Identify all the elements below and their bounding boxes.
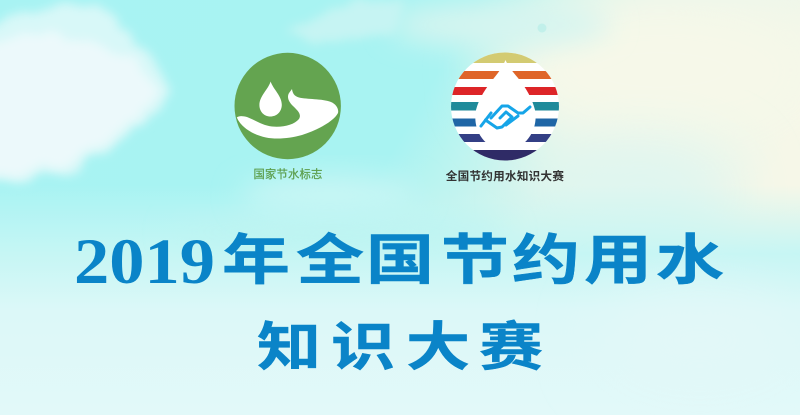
title chars: 节 [441, 230, 509, 291]
title chars: 用 [584, 230, 652, 291]
title chars: 约 [512, 230, 580, 291]
cloud core [0, 34, 155, 176]
title line 2 [257, 318, 543, 377]
logo caption: national water saving mark: 国家节水标志 [254, 167, 322, 181]
title line 2: 识 [331, 318, 395, 377]
title line 2: 赛 [479, 318, 543, 377]
title line 2: 大 [406, 318, 470, 377]
title chars: 水 [656, 230, 724, 291]
logo: national water saving mark [235, 53, 341, 159]
title chars: 全 [296, 230, 364, 291]
blue linked hands [481, 106, 530, 128]
white disc [451, 52, 559, 160]
title line 1 [74, 226, 724, 298]
cupped hand wave [237, 89, 338, 139]
logo: contest emblem [451, 52, 559, 160]
white drop [475, 60, 536, 150]
title chars: 年 [222, 230, 290, 291]
title chars: 国 [366, 230, 434, 291]
logo caption: contest emblem: 全国节约用水知识大赛 [446, 169, 564, 183]
water drop [259, 82, 282, 116]
rainbow bands [451, 52, 559, 160]
cloud outer haze [0, 5, 168, 183]
year: 2019 [74, 226, 215, 298]
title chars [222, 230, 724, 291]
green circle [235, 53, 341, 159]
title line 2: 知 [257, 318, 321, 377]
